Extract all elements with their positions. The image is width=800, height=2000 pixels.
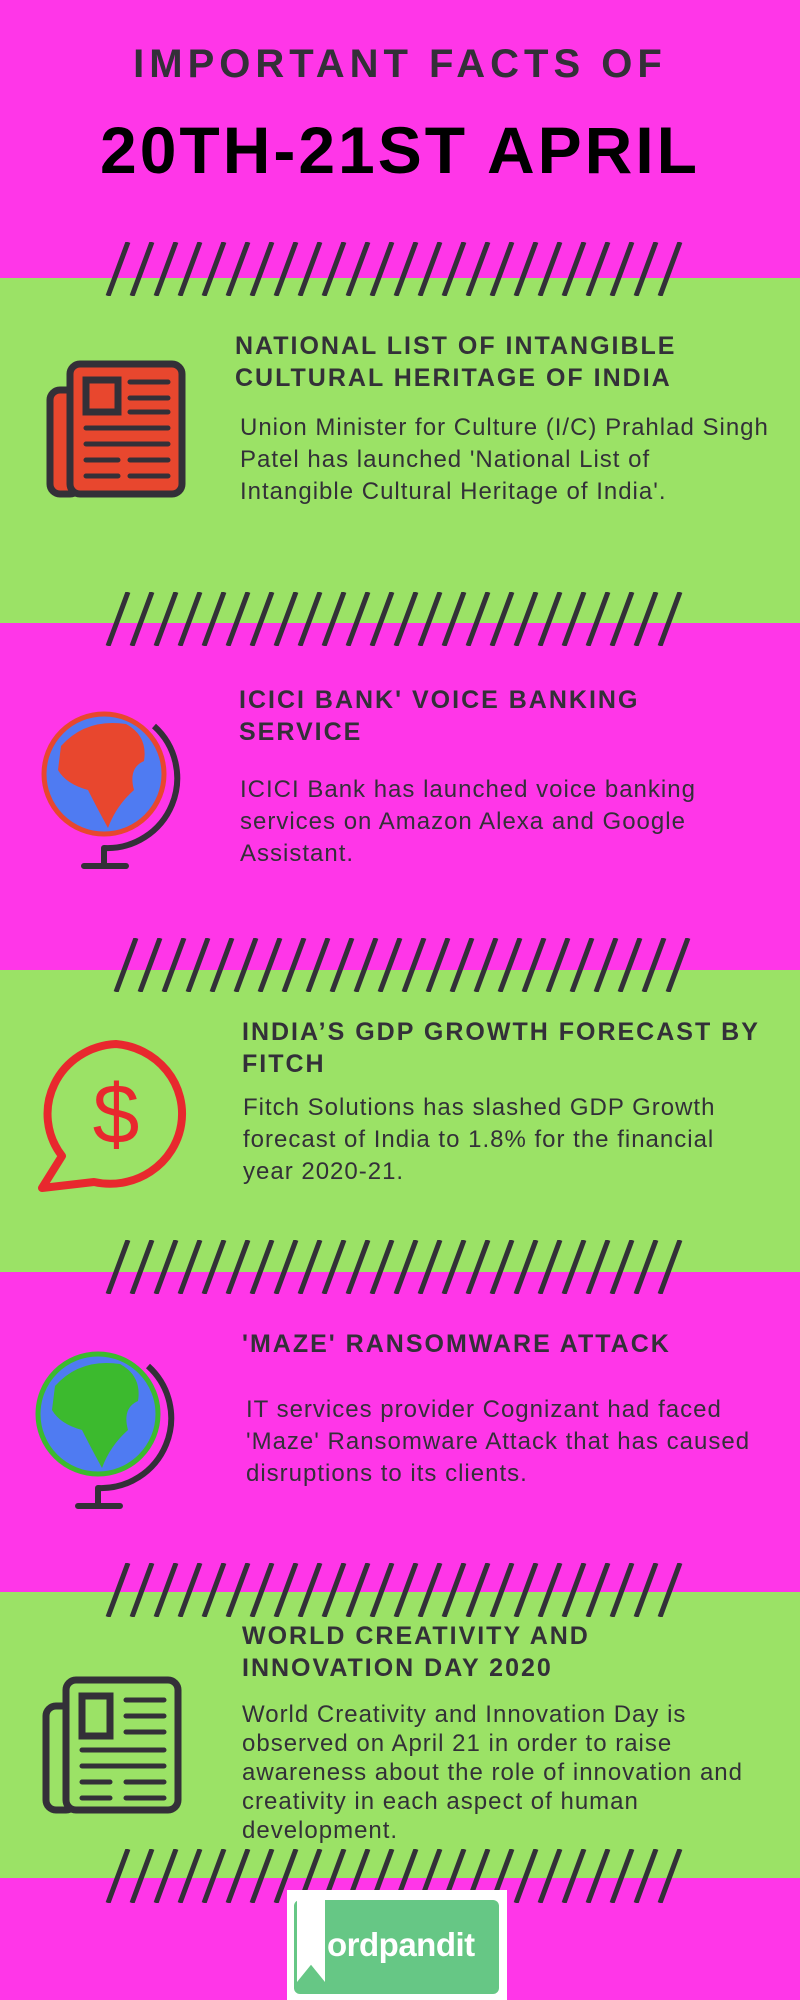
heading 5 (242, 1622, 590, 1682)
body 1: Union Minister for Culture (I/C) Prahlad Singh Patel has launched 'National List of Intangible Cultural Heritage of India'. (240, 414, 769, 505)
band: fact 4 (0, 1272, 800, 1592)
icon: globe green (36, 1352, 174, 1509)
body 4: IT services provider Cognizant had faced 'Maze' Ransomware Attack that has caused disruptions to its clients. (246, 1396, 750, 1487)
icon: dollar speech bubble: $ (93, 1067, 139, 1161)
heading 5: INNOVATION DAY 2020 (242, 1654, 553, 1682)
title line 2: 20TH-21ST APRIL (100, 113, 700, 187)
heading 3: FITCH (242, 1050, 326, 1078)
heading 1: CULTURAL HERITAGE OF INDIA (235, 364, 672, 392)
band: fact 3 (0, 970, 800, 1272)
heading 2 (239, 686, 639, 746)
hatch divider 3 (114, 938, 690, 992)
hatch divider 4 (106, 1240, 682, 1294)
icon: dollar speech bubble (38, 1040, 186, 1192)
logo: wordpandit: ordpandit (327, 1926, 475, 1963)
body 5: World Creativity and Innovation Day is observed on April 21 in order to raise awareness about the role of innovation and creativity in each aspect of human development. (242, 1701, 743, 1844)
hatch divider 1 (106, 242, 682, 296)
heading 3 (242, 1018, 760, 1078)
body 3: Fitch Solutions has slashed GDP Growth forecast of India to 1.8% for the financial year 2020-21. (243, 1094, 715, 1185)
heading 3: INDIA’S GDP GROWTH FORECAST BY (242, 1018, 760, 1046)
hatch divider 6 (106, 1849, 682, 1903)
body 2: ICICI Bank has launched voice banking services on Amazon Alexa and Google Assistant. (240, 776, 696, 867)
heading 5: WORLD CREATIVITY AND (242, 1622, 590, 1650)
hatch divider 2 (106, 592, 682, 646)
heading 4: 'MAZE' RANSOMWARE ATTACK (242, 1330, 671, 1358)
band: fact 1 (0, 278, 800, 623)
icon: newspaper red (46, 360, 186, 498)
band: header (0, 0, 800, 278)
heading 2: ICICI BANK' VOICE BANKING (239, 686, 639, 714)
heading 1: NATIONAL LIST OF INTANGIBLE (235, 332, 676, 360)
title line 1: IMPORTANT FACTS OF (133, 42, 667, 86)
icon: newspaper dark (42, 1676, 182, 1814)
hatch divider 5 (106, 1563, 682, 1617)
logo: wordpandit (287, 1890, 507, 2000)
icon: globe red (42, 712, 180, 869)
heading 1 (235, 332, 676, 392)
band: fact 5 (0, 1592, 800, 1878)
heading 2: SERVICE (239, 718, 362, 746)
band: fact 2 (0, 623, 800, 970)
